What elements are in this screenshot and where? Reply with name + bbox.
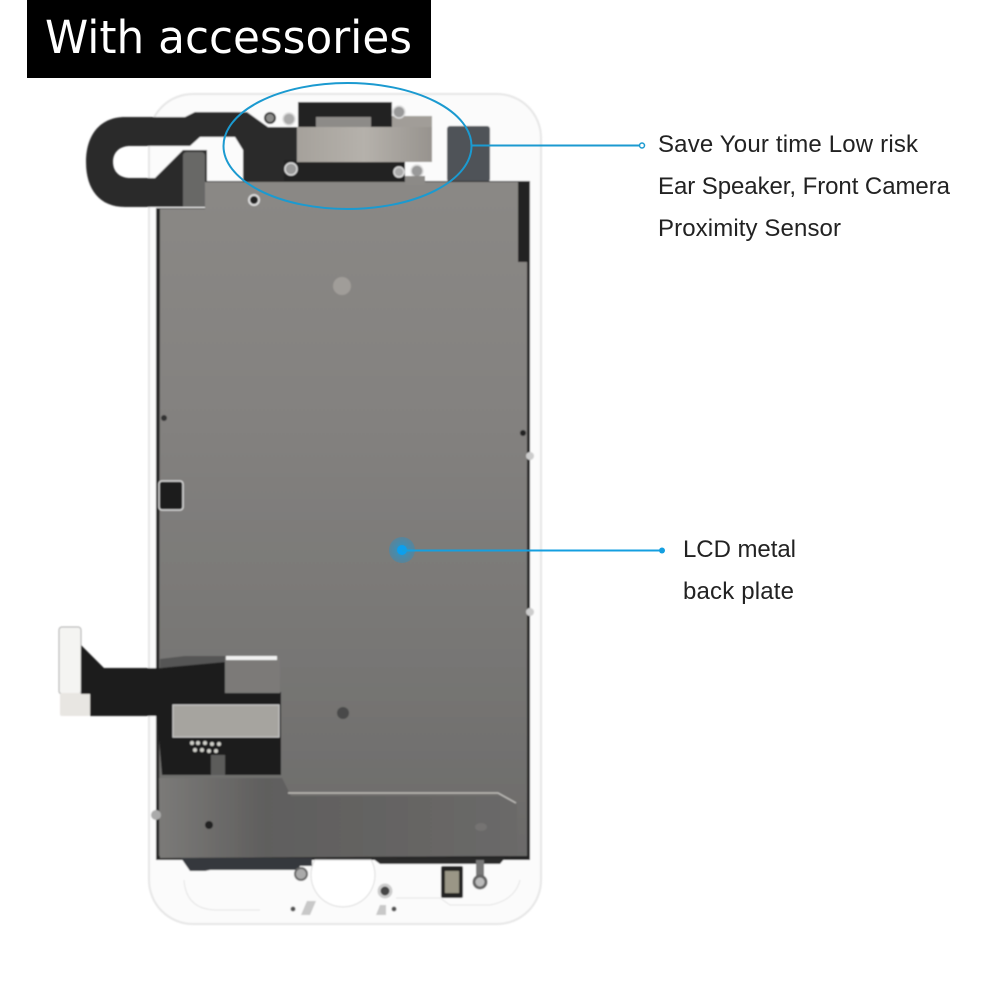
callout: LCD metal back plate: back plate [683,578,794,605]
top assembly details [86,102,490,207]
lower metal shield [151,778,517,858]
callout: top accessories [224,83,951,242]
callout: LCD metal back plate: LCD metal [683,536,796,563]
bottom frame details [181,858,520,915]
callout: top accessories: Ear Speaker, Front Camera [658,173,951,200]
metal back plate [156,176,534,860]
title banner: With accessories [45,11,412,64]
white phone frame [149,94,541,924]
lower flex cable [59,627,281,775]
callout: LCD metal back plate [389,536,796,605]
phone screen assembly [59,94,541,924]
callout: top accessories: Proximity Sensor [658,215,841,242]
callout: top accessories: Save Your time Low risk [658,131,919,158]
title banner [27,0,431,78]
